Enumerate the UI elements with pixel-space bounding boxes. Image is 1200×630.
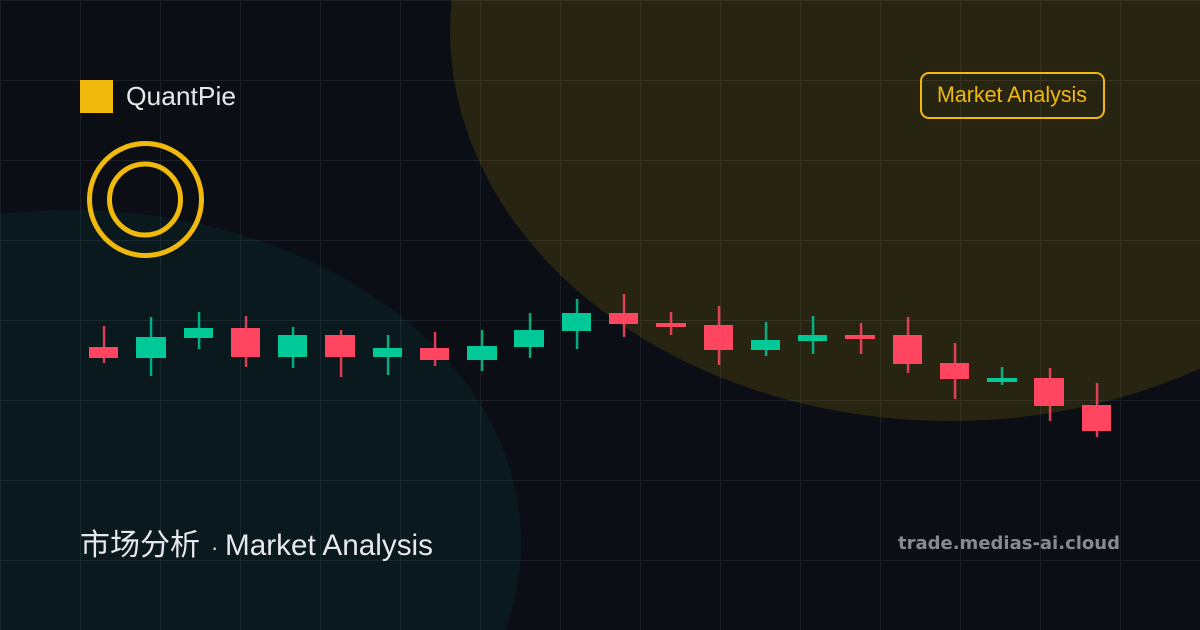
brand logo: QuantPie [80, 80, 236, 113]
candle 18 [893, 317, 922, 373]
candle 1 [89, 326, 118, 363]
background shape: teal ellipse [0, 210, 521, 630]
candle 5 [278, 327, 307, 368]
title: 市场分析 · Market Analysis: 市场分析 [80, 529, 200, 562]
title: 市场分析 · Market Analysis: Market Analysis [225, 529, 433, 562]
candle 10 [514, 313, 544, 358]
candle 17 [845, 323, 875, 354]
candle 4 [231, 316, 260, 367]
candle 22 [1082, 383, 1111, 437]
candle 7 [373, 335, 402, 375]
icon: concentric rings [90, 144, 202, 256]
candle 8 [420, 332, 449, 366]
badge: Market Analysis [921, 73, 1104, 118]
title: 市场分析 · Market Analysis: · [211, 535, 218, 560]
website url: trade.medias-ai.cloud [898, 533, 1120, 554]
candle 11 [562, 299, 591, 349]
brand name: QuantPie [126, 81, 236, 111]
candlestick chart [89, 294, 1111, 437]
candle 12 [609, 294, 638, 337]
badge: Market Analysis: Market Analysis [937, 82, 1087, 107]
candle 19 [940, 343, 969, 399]
candle 13 [656, 312, 686, 335]
candle 16 [798, 316, 827, 354]
candle 9 [467, 330, 497, 371]
candle 14 [704, 306, 733, 365]
candle 2 [136, 317, 166, 376]
candle 21 [1034, 368, 1064, 421]
candle 15 [751, 322, 780, 356]
candle 6 [325, 330, 355, 377]
candle 20 [987, 367, 1017, 385]
candle 3 [184, 312, 213, 349]
background shape: amber ellipse [450, 0, 1200, 421]
icon: brand square [80, 80, 113, 113]
